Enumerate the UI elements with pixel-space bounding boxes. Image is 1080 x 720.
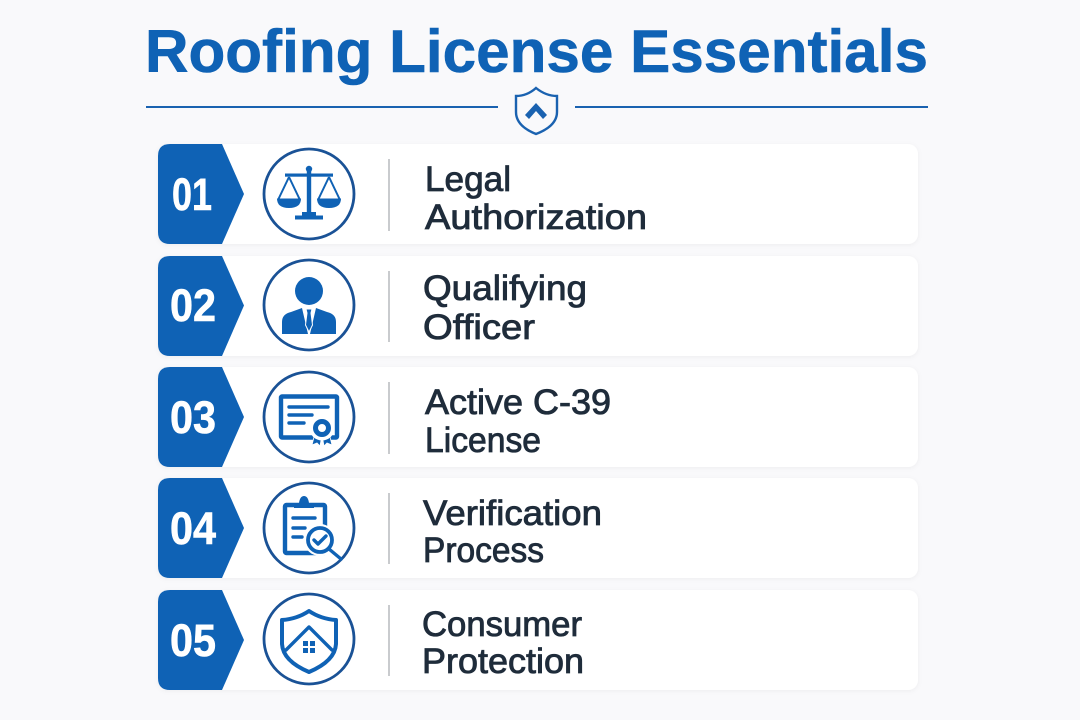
panel: 04 Verification Process (158, 478, 918, 578)
number badge 03: 03 (170, 392, 216, 443)
label text: Consumer (422, 605, 582, 644)
number badge 04 (158, 478, 244, 578)
title: Roofing License Essentials (145, 18, 928, 85)
label text (423, 494, 602, 570)
label text: Officer (423, 308, 535, 347)
number badge 02: 02 (170, 280, 216, 331)
number badge 05 (158, 590, 244, 690)
number badge 03 (158, 367, 244, 467)
label text (422, 605, 584, 681)
label text: Qualifying (423, 269, 587, 308)
icon: certificate (264, 372, 354, 462)
divider (388, 493, 390, 564)
icon: person in suit (264, 260, 354, 350)
panel: 03 Active C-39 License (158, 367, 918, 467)
number badge 04: 04 (170, 503, 216, 554)
label text: Verification (423, 494, 602, 533)
label text: Authorization (425, 198, 647, 237)
label text (425, 383, 611, 460)
panel: 02 Qualifying Officer (158, 256, 918, 356)
number badge 01: 01 (172, 169, 212, 220)
label text: License (425, 421, 541, 460)
icon: scales of justice (264, 149, 354, 239)
icon: shield with house (264, 594, 354, 684)
title divider with shield emblem (146, 88, 928, 134)
label text: Protection (422, 642, 584, 681)
icon: clipboard with magnifier (264, 483, 354, 573)
number badge 02 (158, 256, 244, 356)
divider (388, 382, 390, 454)
panel: 01 Legal Authorization (158, 144, 918, 244)
label text: Process (423, 531, 544, 570)
panel: 05 Consumer Protection (158, 590, 918, 690)
label text (425, 160, 647, 237)
label text (423, 269, 587, 347)
number badge 05: 05 (170, 615, 216, 666)
label text: Legal (425, 160, 511, 199)
label text: Active C-39 (425, 383, 611, 422)
divider (388, 605, 390, 676)
divider (388, 159, 390, 231)
divider (388, 271, 390, 342)
number badge 01 (158, 144, 244, 244)
